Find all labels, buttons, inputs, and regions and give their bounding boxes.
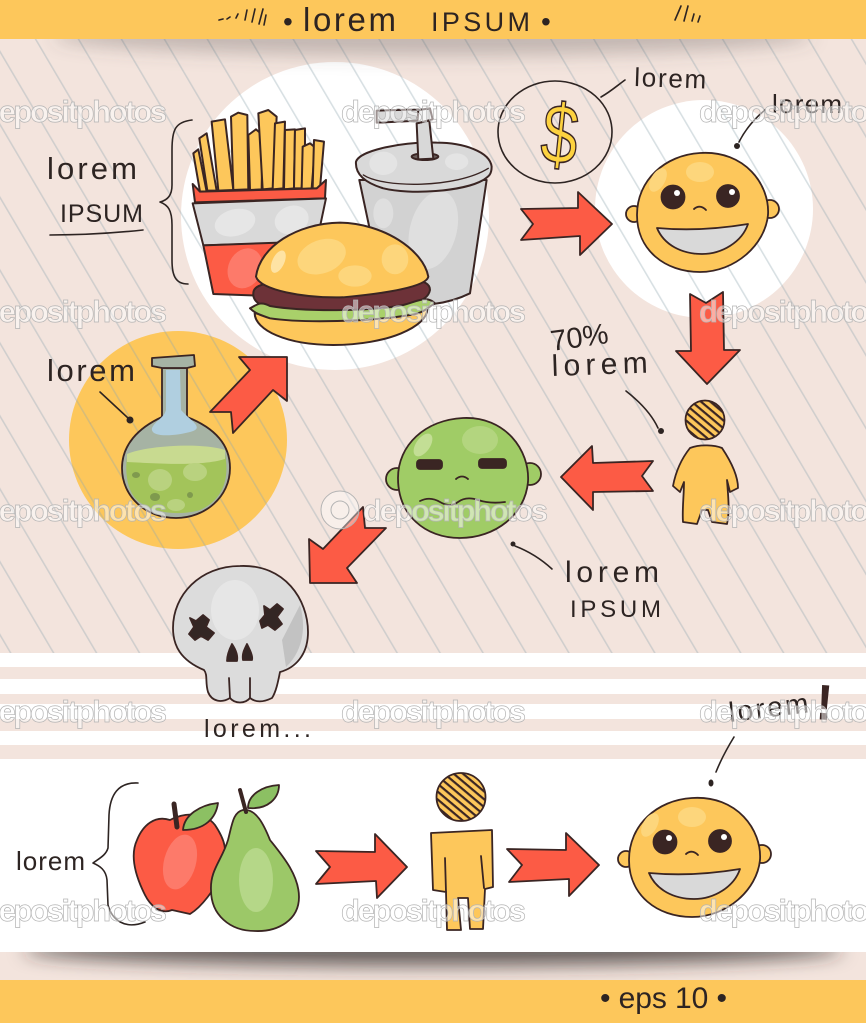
label: lorem ipsum left with underline [47,151,143,235]
label: lorem ipsum left with underline: IPSUM [60,200,143,228]
white circle behind food [181,62,489,370]
header title: lorem [303,1,396,38]
header bar [0,0,866,39]
arrow: person to zombie [561,446,653,510]
label: lorem dots: lorem... [204,715,311,743]
smiley face lower [618,798,771,917]
flask [122,355,230,518]
burger [250,223,435,345]
white lower panel [0,759,866,952]
watermarks: depositphotos [363,493,548,528]
brace: fruit [93,783,145,925]
food group: fries, cup, burger [193,108,492,345]
label: lorem flask [47,353,135,424]
label: lorem top [601,62,707,97]
yellow circle behind flask [69,331,287,549]
label: lorem top: lorem [634,62,707,95]
footer text: • eps 10 • [600,982,727,1015]
label: lorem exclamation: ! [814,674,835,731]
header title: • [283,6,293,37]
label: lorem exclamation [708,674,835,786]
zombie face [386,418,541,538]
watermarks: depositphotos [341,94,526,129]
lower panel shadow [17,952,849,980]
header title: • [541,6,551,37]
watermarks: depositphotos [341,893,526,928]
brace: food [160,120,192,284]
arrow: fruit to person [316,834,407,898]
header title: IPSUM [431,7,530,37]
dollar circle [498,81,612,183]
arrow: food to smiley [521,192,612,255]
apple [134,803,225,914]
arrow: smiley to person [676,292,740,384]
label: lorem ipsum center: IPSUM [570,596,661,623]
header squiggle left [219,9,266,25]
watermarks: depositphotos [341,694,526,729]
watermarks: depositphotos [341,294,526,329]
label: lorem lower: lorem [16,846,85,876]
header title [283,1,551,38]
skull [173,566,308,702]
arrow: flask to food [210,357,287,433]
pear [211,785,299,931]
white circle behind smiley [595,100,813,318]
label: lorem ipsum left with underline: lorem [47,151,137,186]
arrow: zombie to skull [309,507,386,583]
label: lorem top right [734,89,842,149]
label: 70% lorem: lorem [551,347,648,383]
label: 70% lorem [549,318,664,434]
person lower [431,773,493,930]
label: lorem flask: lorem [47,353,135,388]
header squiggle right [675,6,700,22]
stripes band [0,653,866,745]
drink cup [356,108,492,304]
label: lorem top right: lorem [772,89,842,119]
label: lorem ipsum center: lorem [565,556,659,589]
label: lorem exclamation: lorem [727,687,810,728]
label: lorem ipsum center [510,542,661,623]
arrow: person to smiley [507,833,599,896]
dollar sign: $ [537,86,583,183]
fries carton [193,110,326,296]
person upper [673,400,738,524]
header shadow [55,39,811,64]
label: 70% lorem: 70% [549,318,610,358]
footer bar [0,980,866,1023]
smiley face top [626,153,779,272]
